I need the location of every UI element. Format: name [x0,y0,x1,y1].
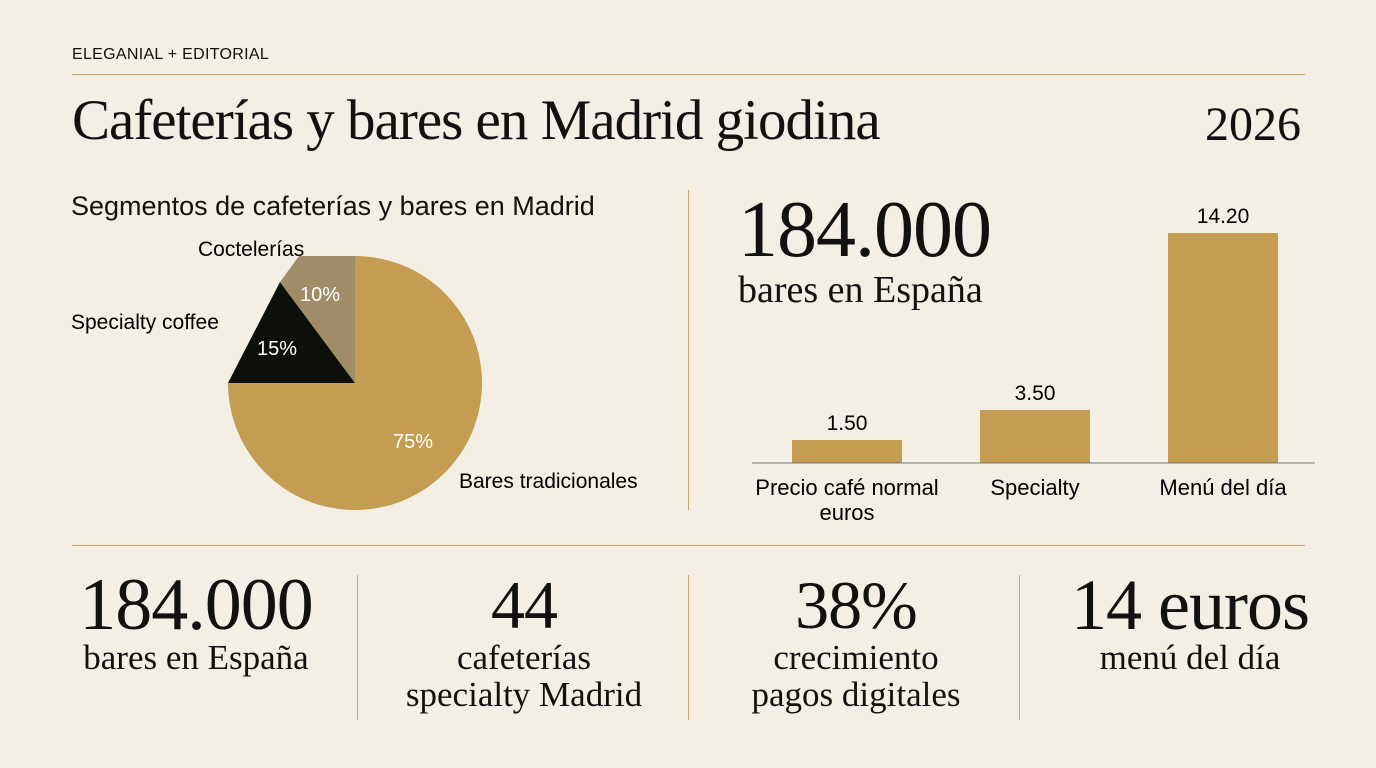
pie heading: Segmentos de cafeterías y bares en Madrid [71,191,595,221]
pie [71,238,638,510]
big stat top: 184.000 [738,186,991,274]
stat 2: 44 [491,567,557,643]
pie: Coctelerías [198,238,304,261]
big stat top: bares en España [738,269,983,311]
bar chart: 14.20 [1197,205,1249,228]
stat 3: crecimiento [773,638,939,677]
bar chart: Specialty [990,475,1080,500]
stat 3: 38% [795,567,917,643]
stat 4: menú del día [1100,638,1280,677]
stat 2: cafeterías [457,638,591,677]
pie: Specialty coffee [71,311,219,334]
pie: 15% [257,338,297,360]
stat 2: specialty Madrid [406,675,642,714]
kicker: ELEGANIAL + EDITORIAL [72,46,269,63]
stat 3 [752,567,960,714]
panel: pie chart [71,191,638,510]
bar chart: Menú del día [1159,475,1287,500]
stat 2 [406,567,642,714]
stat 1: 184.000 [79,564,313,646]
pie: Bares tradicionales [459,470,638,493]
bar chart: 1.50 [827,412,867,435]
year: 2026 [1205,98,1301,151]
bar chart: 3.50 [1015,382,1055,405]
stat 4: 14 euros [1071,565,1309,645]
bar chart [752,205,1315,525]
bar chart: euros [819,500,875,525]
stat 1: bares en España [83,638,309,677]
stat 3: pagos digitales [752,675,960,714]
bar chart: Precio café normal [755,475,939,500]
title: Cafeterías y bares en Madrid giodina [72,89,880,152]
pie: 10% [300,284,340,306]
pie: 75% [393,431,433,453]
